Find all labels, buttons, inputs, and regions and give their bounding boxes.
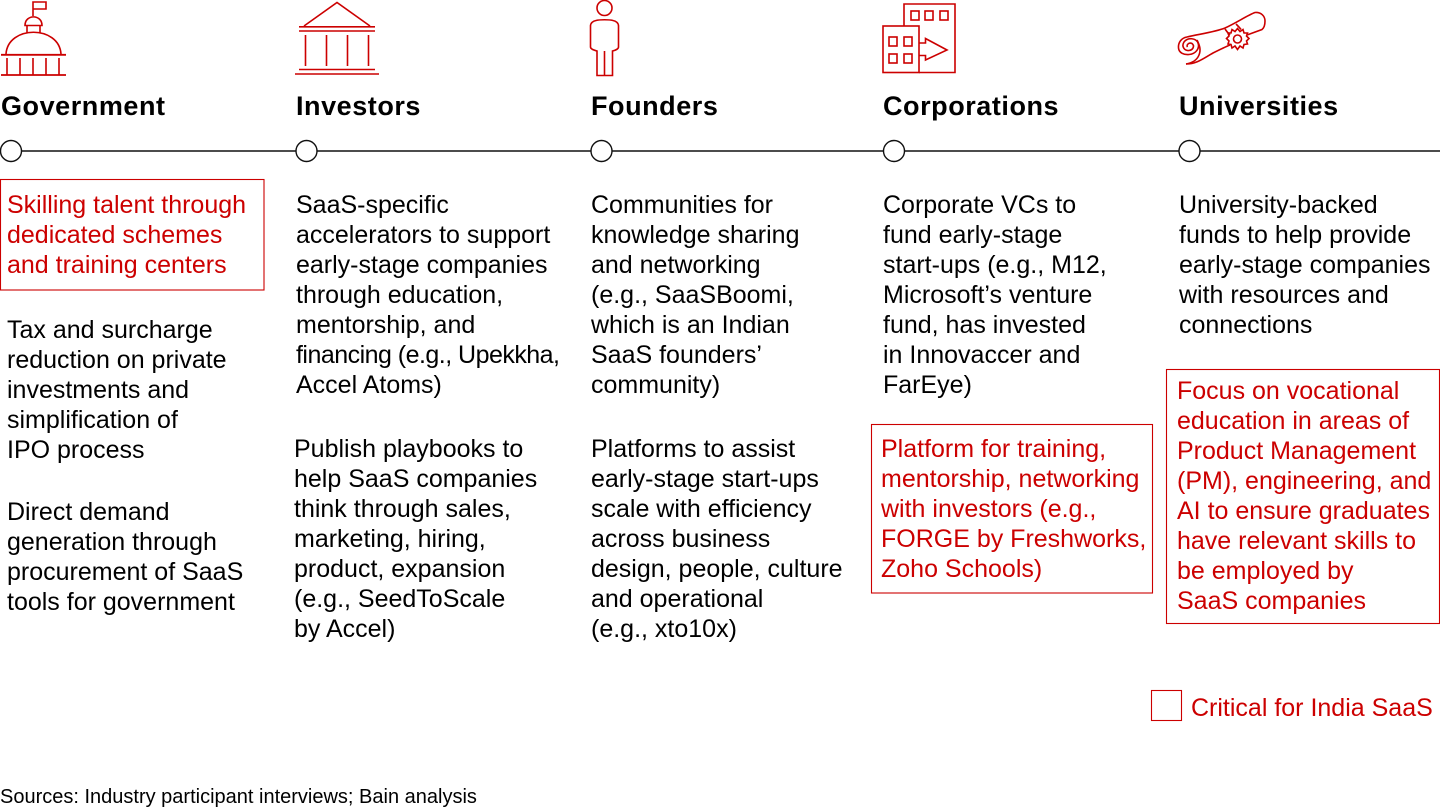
text: accelerators: mentorship, and (296, 311, 475, 339)
legend: Critical for India SaaS (1191, 694, 1433, 722)
callout: vocational education: Product Management (1177, 437, 1416, 465)
text: corporate VCs: Corporate VCs to (883, 191, 1076, 219)
column: Investors (294, 2, 560, 643)
source note: Sources: Industry participant interviews; Bain analysis (0, 786, 477, 808)
icon: office buildings with arrow (883, 4, 955, 72)
callout: skilling talent: dedicated schemes (7, 221, 222, 249)
callout: skilling talent: Skilling talent through (7, 191, 246, 219)
column: Universities (1166, 12, 1440, 624)
text: platforms: early-stage start-ups (591, 465, 819, 493)
text: platforms: Platforms to assist (591, 435, 795, 463)
text: tax and surcharge: Tax and surcharge (7, 316, 213, 344)
text: tax and surcharge: reduction on private (7, 346, 227, 374)
icon: person (590, 0, 618, 76)
heading: Founders: Founders (591, 91, 718, 121)
text: university-backed funds: University-backed (1179, 191, 1378, 219)
text: direct demand: generation through (7, 528, 217, 556)
text: accelerators: SaaS-specific (296, 191, 449, 219)
text: corporate VCs: Microsoft’s venture (883, 281, 1092, 309)
column: Government (0, 2, 264, 616)
text: communities (590, 191, 799, 399)
text: playbooks: help SaaS companies (294, 465, 537, 493)
column: Corporations (872, 4, 1152, 593)
text: university-backed funds (1178, 191, 1431, 339)
text: communities: which is an Indian (590, 311, 790, 339)
text: accelerators: early-stage companies (296, 251, 548, 279)
text: university-backed funds: funds to help provide (1179, 221, 1411, 249)
text: corporate VCs: start-ups (e.g., M12, (883, 251, 1107, 279)
text: communities: Communities for (591, 191, 773, 219)
callout: platform for training (872, 424, 1152, 593)
callout: skilling talent (0, 180, 264, 290)
text: tax and surcharge: IPO process (7, 436, 145, 464)
text: platforms: design, people, culture (591, 555, 843, 583)
icon: diploma scroll with seal (1178, 12, 1265, 64)
callout: vocational education: be employed by (1177, 557, 1354, 585)
text: tax and surcharge: simplification of (7, 406, 178, 434)
text: accelerators: financing (e.g., Upekkha, (296, 341, 560, 369)
text: accelerators: through education, (296, 281, 503, 309)
heading: Government: Government (1, 91, 166, 121)
callout: platform for training: with investors (e.g., (880, 495, 1096, 523)
text: communities: community) (591, 371, 720, 399)
callout: platform for training: FORGE by Freshworks, (881, 525, 1146, 553)
text: playbooks: by Accel) (294, 615, 395, 643)
text: communities: knowledge sharing (591, 221, 799, 249)
text: accelerators (296, 191, 560, 399)
text: university-backed funds: early-stage companies (1179, 251, 1431, 279)
callout: vocational education: have relevant skills to (1177, 527, 1416, 555)
text: direct demand (7, 498, 243, 616)
text: accelerators: accelerators to support (296, 221, 550, 249)
text: corporate VCs: in Innovaccer and (883, 341, 1080, 369)
icon: government dome (1, 2, 66, 75)
callout: vocational education: Focus on vocational (1177, 377, 1399, 405)
text: direct demand: Direct demand (7, 498, 170, 526)
text: platforms: and operational (591, 585, 763, 613)
text: playbooks: (e.g., SeedToScale (294, 585, 505, 613)
text: university-backed funds: with resources and (1178, 281, 1389, 309)
text: playbooks: product, expansion (294, 555, 505, 583)
callout: platform for training: Zoho Schools) (881, 555, 1042, 583)
heading: Corporations: Corporations (883, 91, 1059, 121)
text: communities: (e.g., SaaSBoomi, (591, 281, 794, 309)
heading: Universities: Universities (1179, 91, 1339, 121)
callout: vocational education: education in areas of (1177, 407, 1409, 435)
callout: vocational education: SaaS companies (1177, 587, 1366, 615)
text: platforms: scale with efficiency (591, 495, 812, 523)
timeline (0, 140, 1440, 162)
text: corporate VCs (883, 191, 1107, 399)
callout: skilling talent: and training centers (7, 251, 227, 279)
text: platforms: (e.g., xto10x) (591, 615, 737, 643)
text: communities: SaaS founders’ (591, 341, 762, 369)
callout: vocational education (1166, 370, 1440, 624)
text: direct demand: tools for government (7, 588, 235, 616)
text: playbooks (294, 435, 537, 643)
text: tax and surcharge: investments and (7, 376, 189, 404)
text: university-backed funds: connections (1179, 311, 1312, 339)
callout: platform for training: Platform for training, (881, 435, 1106, 463)
text: corporate VCs: fund, has invested (883, 311, 1086, 339)
text: platforms (591, 435, 843, 643)
text: corporate VCs: FarEye) (883, 371, 972, 399)
text: direct demand: procurement of SaaS (7, 558, 243, 586)
text: accelerators: Accel Atoms) (296, 371, 442, 399)
text: tax and surcharge (7, 316, 227, 464)
column: Founders (590, 0, 843, 643)
callout: platform for training: mentorship, networking (881, 465, 1139, 493)
icon: bank building (295, 2, 379, 74)
callout: vocational education: (PM), engineering, and (1177, 467, 1431, 495)
heading: Investors: Investors (296, 91, 421, 121)
text: corporate VCs: fund early-stage (883, 221, 1062, 249)
text: playbooks: marketing, hiring, (294, 525, 486, 553)
text: platforms: across business (591, 525, 770, 553)
text: playbooks: Publish playbooks to (294, 435, 523, 463)
text: playbooks: think through sales, (294, 495, 511, 523)
text: communities: and networking (591, 251, 761, 279)
callout: vocational education: AI to ensure graduates (1177, 497, 1430, 525)
